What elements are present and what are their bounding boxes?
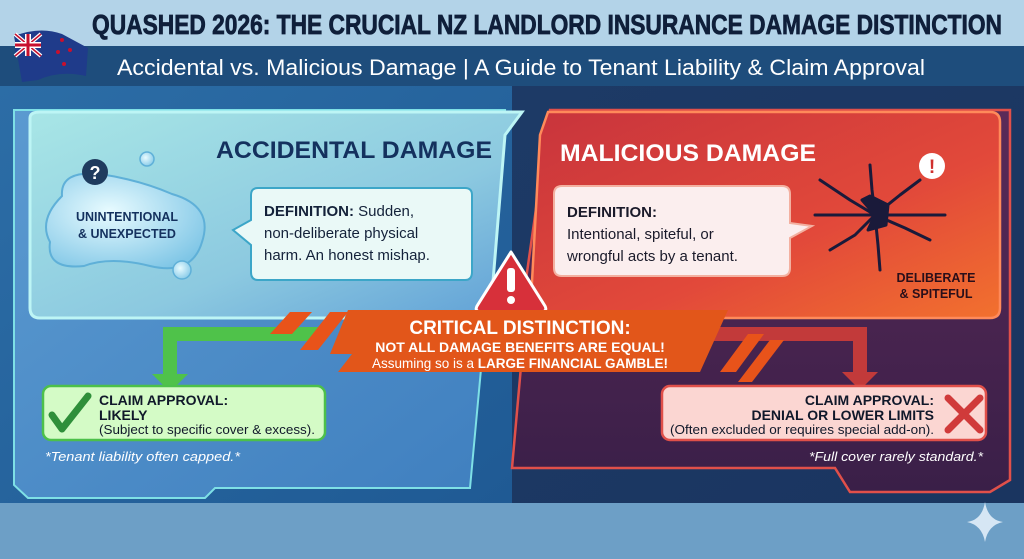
subtitle: Accidental vs. Malicious Damage | A Guide to Tenant Liability & Claim Approval bbox=[117, 55, 925, 80]
callout: claim approval denial bbox=[662, 386, 986, 440]
icon: sparkle bbox=[967, 502, 1003, 542]
panel: accidental outer bbox=[14, 110, 505, 498]
callout: accidental definition: DEFINITION: Sudden, bbox=[264, 203, 414, 220]
footnote: tenant liability: *Tenant liability often capped.* bbox=[45, 449, 241, 464]
callout: malicious definition bbox=[554, 186, 812, 276]
callout: claim approval likely: (Subject to specific cover & excess). bbox=[99, 423, 315, 437]
header band bbox=[0, 0, 1024, 86]
callout: claim approval likely: CLAIM APPROVAL: bbox=[99, 392, 228, 408]
icon: crack bbox=[815, 165, 945, 270]
text: deliberate bbox=[897, 271, 975, 301]
footnote: full cover: *Full cover rarely standard.* bbox=[809, 449, 984, 464]
banner: critical distinction: CRITICAL DISTINCTION: bbox=[409, 318, 631, 339]
callout: accidental definition: non-deliberate physical bbox=[264, 225, 418, 242]
banner: critical distinction: NOT ALL DAMAGE BENEFITS ARE EQUAL! bbox=[375, 339, 665, 355]
arrow: red right bbox=[700, 334, 878, 390]
icon: NZ flag bbox=[14, 30, 88, 82]
heading: accidental damage: ACCIDENTAL DAMAGE bbox=[216, 137, 492, 164]
icon: water blob: ? bbox=[90, 163, 100, 183]
callout: claim approval denial: CLAIM APPROVAL: bbox=[805, 392, 934, 408]
banner: critical distinction bbox=[270, 310, 784, 382]
icon: exclamation circle: ! bbox=[929, 157, 935, 178]
callout: malicious definition: DEFINITION: bbox=[567, 204, 657, 221]
callout: accidental definition: harm. An honest mishap. bbox=[264, 247, 430, 264]
panel: malicious outer bbox=[512, 110, 1010, 492]
callout: claim approval denial: DENIAL OR LOWER LIMITS bbox=[751, 407, 934, 423]
icon: water blob: & UNEXPECTED bbox=[78, 227, 176, 241]
callout: claim approval likely bbox=[43, 386, 325, 440]
text: deliberate: & SPITEFUL bbox=[900, 287, 973, 301]
icon: water blob bbox=[46, 152, 205, 279]
panel: malicious card bbox=[530, 112, 1000, 318]
icon: warning triangle bbox=[476, 252, 546, 312]
callout: claim approval denial: (Often excluded or requires special add-on). bbox=[670, 423, 934, 437]
arrow: green left bbox=[152, 334, 320, 392]
icon: water blob: UNINTENTIONAL bbox=[76, 210, 178, 224]
heading: malicious damage: MALICIOUS DAMAGE bbox=[560, 140, 816, 167]
panel: accidental card bbox=[30, 112, 522, 318]
icon: exclamation circle bbox=[919, 153, 945, 179]
callout: accidental definition bbox=[233, 188, 472, 280]
callout: malicious definition: Intentional, spiteful, or bbox=[567, 226, 714, 243]
banner: critical distinction: Assuming so is a LARGE FINANCIAL GAMBLE! bbox=[372, 356, 668, 371]
callout: malicious definition: wrongful acts by a tenant. bbox=[566, 248, 738, 265]
text: deliberate: DELIBERATE bbox=[897, 271, 975, 285]
callout: claim approval likely: LIKELY bbox=[99, 407, 148, 423]
